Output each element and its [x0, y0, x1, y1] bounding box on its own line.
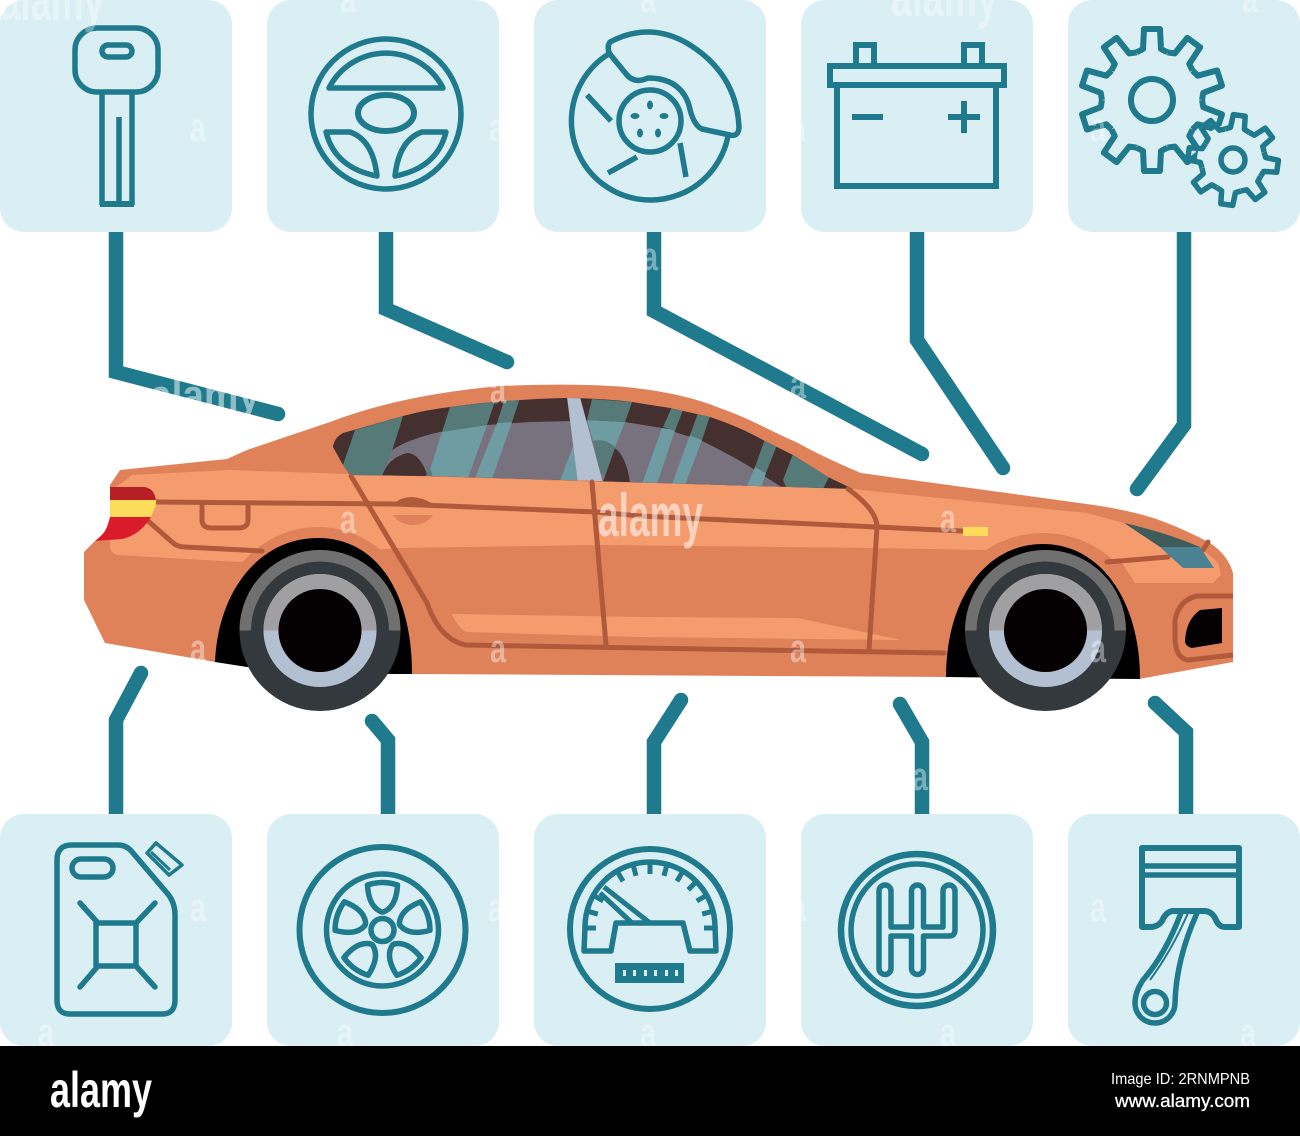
- car upper light band: [110, 470, 1221, 583]
- panel: brake disc: [534, 0, 766, 232]
- panel: piston: [1068, 814, 1300, 1046]
- panel: gear shift: [801, 814, 1033, 1046]
- watermark: a: [488, 886, 505, 930]
- footer band: [0, 1046, 1300, 1136]
- connector: steering wheel to car: [386, 232, 507, 362]
- watermark: a: [1090, 886, 1107, 930]
- watermark: a: [790, 886, 807, 930]
- panel: fuel canister: [0, 814, 232, 1046]
- watermark: a: [190, 106, 207, 150]
- panel: battery: [801, 0, 1033, 232]
- connector: piston to car: [1155, 703, 1186, 814]
- watermark: a: [912, 755, 929, 799]
- watermark: a: [940, 1011, 957, 1055]
- rear wheel: [240, 550, 400, 711]
- connector: fuel to car: [116, 673, 141, 814]
- watermark: a: [490, 627, 507, 671]
- icon: steering wheel: [311, 39, 461, 189]
- front wheel: [965, 550, 1126, 711]
- connector: brake to car: [654, 232, 922, 454]
- icon: large gear: [1080, 29, 1224, 171]
- front bumper vent: [1175, 596, 1233, 660]
- icon: speedometer: [570, 849, 730, 1009]
- watermark: a: [640, 1011, 657, 1055]
- icon: key: [75, 28, 158, 204]
- front wheel arch: [946, 544, 1140, 679]
- watermark: a: [190, 627, 207, 671]
- panel: ignition key: [0, 0, 232, 232]
- icon: brake disc and caliper: [571, 32, 739, 200]
- connector: gear shift to car: [900, 704, 922, 814]
- icon: small gear: [1182, 109, 1284, 211]
- connector: key to car: [116, 232, 278, 414]
- watermark: a: [340, 498, 357, 542]
- watermark: a: [1090, 627, 1107, 671]
- sill highlight: [452, 614, 901, 640]
- watermark: alamy: [598, 482, 703, 549]
- image id: Image ID: 2RNMPNB: [1111, 1071, 1250, 1088]
- icon: gear shift pattern: [841, 854, 993, 1006]
- watermark: a: [337, 1011, 354, 1055]
- watermark: a: [790, 363, 807, 407]
- watermark: a: [490, 368, 507, 412]
- body lines: [147, 476, 1208, 653]
- panel: steering wheel: [267, 0, 499, 232]
- watermark: alamy: [150, 371, 260, 420]
- watermark: a: [940, 497, 957, 541]
- watermark: a: [1240, 1011, 1257, 1055]
- icon: battery: [830, 45, 1004, 186]
- connector: speedometer to car: [654, 700, 681, 814]
- side marker light: [963, 527, 988, 536]
- rear wheel arch: [215, 538, 412, 674]
- watermark: a: [1090, 106, 1107, 150]
- watermark: a: [489, 106, 506, 150]
- connector end caps: [134, 355, 1162, 728]
- watermark: a: [642, 235, 659, 279]
- car illustration: [84, 385, 1233, 711]
- connector: battery to car: [917, 232, 1003, 468]
- watermark: a: [38, 1011, 55, 1055]
- icon: piston: [1135, 848, 1239, 1023]
- footer logo: alamy: [50, 1062, 152, 1118]
- icon: jerry can: [57, 843, 182, 1014]
- window: [333, 398, 853, 489]
- watermark: a: [790, 106, 807, 150]
- website: www.alamy.com: [1114, 1091, 1250, 1111]
- panel: speedometer: [534, 814, 766, 1046]
- tail light: [95, 487, 156, 541]
- panel: gears: [1068, 0, 1300, 232]
- icon: wheel with rim: [300, 847, 466, 1013]
- connector: gears to car: [1137, 232, 1184, 489]
- connector: tyre to car: [372, 721, 388, 814]
- door handle: [393, 497, 433, 525]
- headlight: [1124, 523, 1214, 568]
- wheel arch surrounds: [214, 527, 1147, 640]
- panel: tyre: [267, 814, 499, 1046]
- watermark: a: [190, 886, 207, 930]
- car body: [84, 385, 1233, 679]
- watermark: a: [790, 627, 807, 671]
